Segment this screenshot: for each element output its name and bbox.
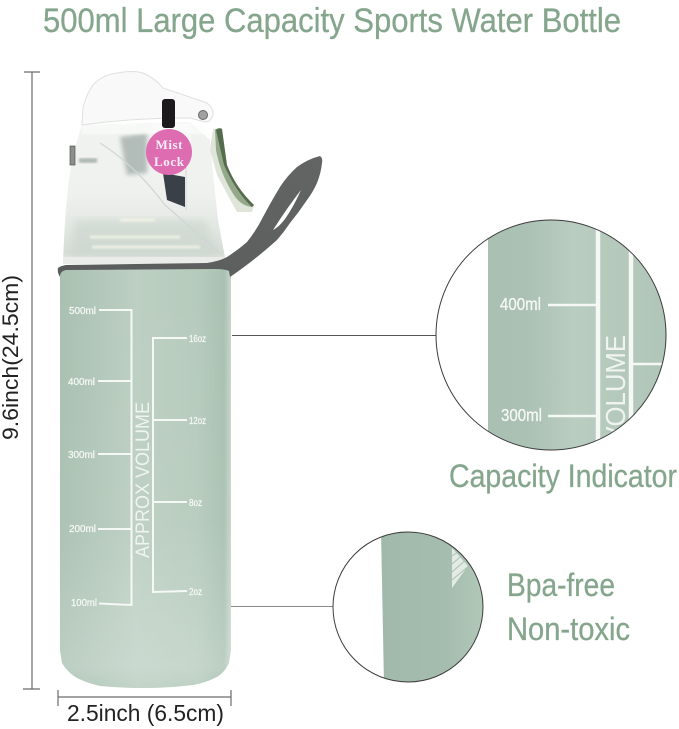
width label: 2.5inch (6.5cm) bbox=[67, 700, 224, 726]
zoom circle: capacity indicator: 300ml bbox=[501, 405, 542, 425]
ml labels: 300ml bbox=[68, 449, 95, 461]
oz labels: 12oz bbox=[189, 415, 206, 427]
mist lock sticker: Lock bbox=[154, 154, 185, 169]
transparent lid bbox=[82, 72, 213, 125]
material labels bbox=[507, 567, 630, 647]
title: 500ml Large Capacity Sports Water Bottle bbox=[43, 2, 621, 40]
zoom circle: capacity indicator: 400ml bbox=[500, 294, 541, 314]
ml labels: 100ml bbox=[71, 597, 97, 609]
material labels: Bpa-free bbox=[507, 567, 615, 603]
material labels: Non-toxic bbox=[507, 611, 630, 647]
bottle cap bbox=[63, 72, 225, 265]
ml labels bbox=[68, 305, 97, 609]
connector line: material bbox=[231, 606, 333, 608]
black nozzle tube bbox=[162, 99, 175, 128]
green trigger bbox=[210, 128, 254, 212]
mist lock sticker: Mist bbox=[156, 137, 183, 152]
mist lock sticker bbox=[146, 129, 192, 175]
oz labels: 2oz bbox=[189, 586, 202, 598]
zoom circle: material bbox=[333, 530, 490, 685]
lower nozzle tube bbox=[163, 173, 185, 207]
oz labels: 16oz bbox=[189, 333, 206, 345]
ml labels: 400ml bbox=[68, 376, 95, 388]
volume caption: APPROX VOLUME bbox=[132, 402, 154, 558]
measurement scale bbox=[68, 305, 206, 609]
height dimension bbox=[0, 72, 40, 689]
ml labels: 500ml bbox=[69, 305, 96, 317]
oz labels: 8oz bbox=[189, 497, 202, 509]
connector line: capacity bbox=[232, 334, 436, 336]
zoom circle: capacity indicator: APPROX VOLUME bbox=[600, 335, 631, 558]
bottle body bbox=[60, 268, 231, 688]
oz labels bbox=[189, 333, 206, 598]
ml labels: 200ml bbox=[69, 523, 96, 535]
hinge screw bbox=[198, 110, 208, 120]
grey strap bbox=[58, 156, 322, 277]
bottle bbox=[58, 72, 322, 688]
zoom circle: capacity indicator bbox=[436, 220, 666, 450]
width dimension bbox=[58, 690, 231, 726]
side clip bbox=[70, 146, 75, 165]
